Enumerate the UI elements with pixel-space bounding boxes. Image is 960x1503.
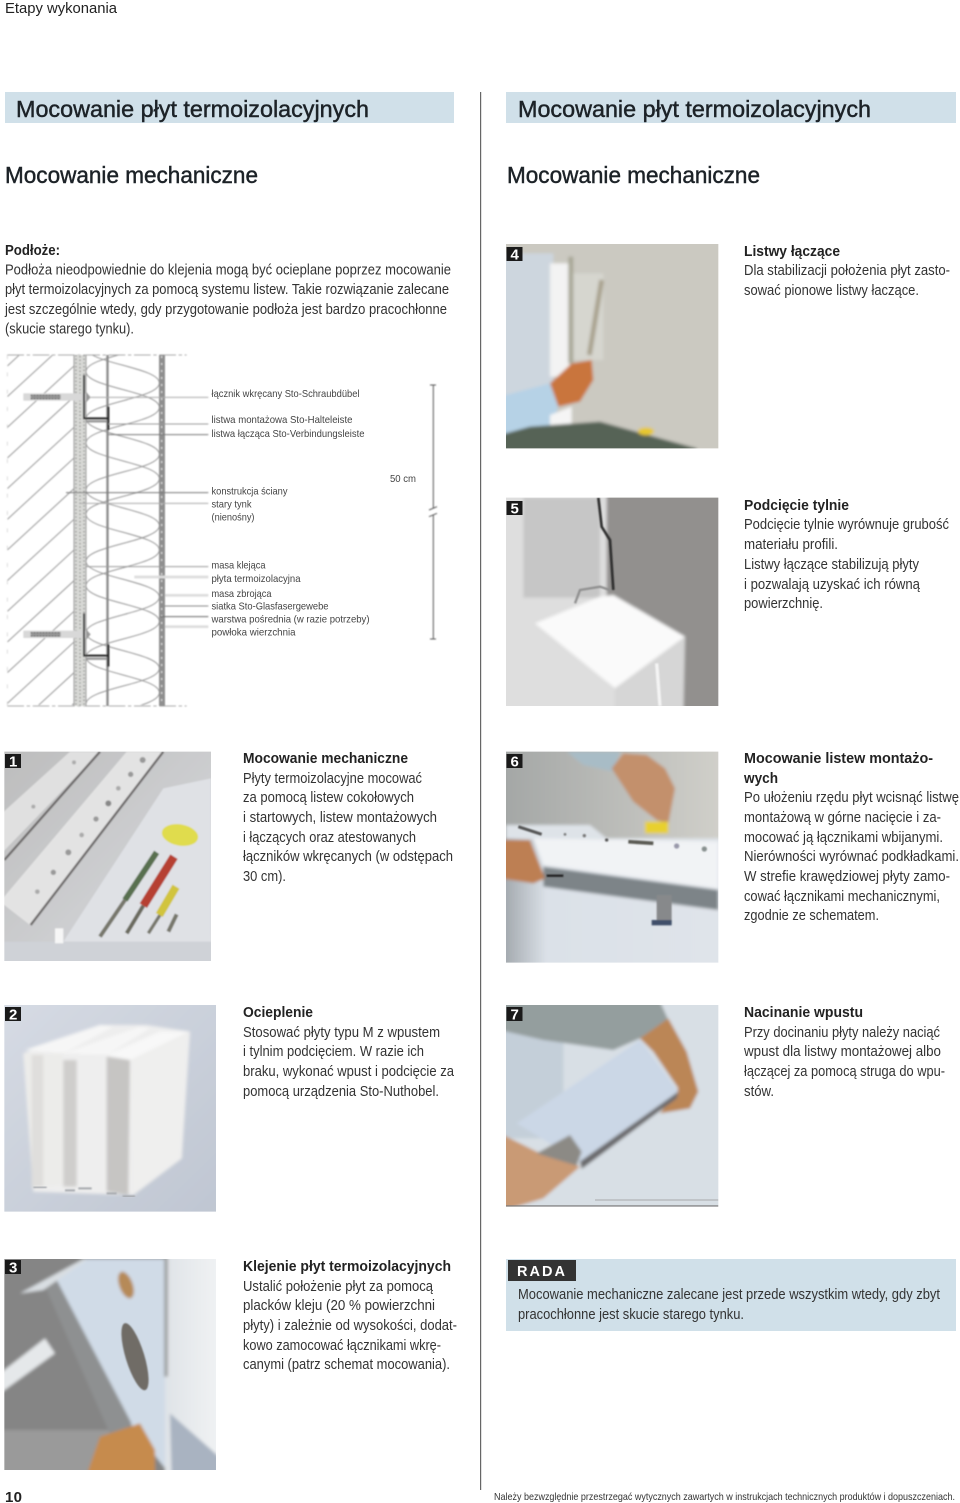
text block: substrate <box>4 243 451 338</box>
text block: step 4: sować pionowe listwy łaczące. <box>744 283 919 299</box>
callout: tip <box>506 1259 956 1331</box>
panel: right title band: Mocowanie płyt termoizolacyjnych <box>518 96 871 122</box>
text block: step 3: Klejenie płyt termoizolacyjnych <box>243 1259 451 1275</box>
badge 2: 2 <box>9 1006 17 1024</box>
text block: step 2: Ocieplenie <box>243 1005 313 1021</box>
text block: step 6: Mocowanie listew montażo- <box>744 751 933 767</box>
text block: step 2: pomocą urządzenia Sto-Nuthobel. <box>243 1084 439 1100</box>
diagram labels: warstwa pośrednia (w razie potrzeby) <box>211 614 370 626</box>
photo 7 <box>506 1005 718 1207</box>
diagram labels: 50 cm <box>390 473 416 485</box>
badge 3 <box>5 1260 21 1276</box>
badge 3: 3 <box>9 1260 17 1276</box>
text block: step 7: Przy docinaniu płyty należy naciąć <box>744 1025 940 1041</box>
text block: step 2: i tylnim podcięciem. W razie ich <box>243 1044 424 1060</box>
left subheading: Mocowanie mechaniczne <box>5 162 258 188</box>
diagram labels: stary tynk <box>212 498 252 510</box>
badge 2 <box>5 1006 21 1024</box>
badge 6 <box>506 754 522 770</box>
text block: step 1 <box>243 751 453 885</box>
text block: step 5: Listwy łączące stabilizują płyty <box>744 557 920 573</box>
text block: step 6: mocować ją łącznikami wbijanymi. <box>744 830 943 846</box>
text block: step 2 <box>243 1005 455 1100</box>
text block: substrate: jest szczególnie wtedy, gdy przygotowanie podłoża jest bardzo pracochłonne <box>4 302 447 318</box>
text block: step 7 <box>743 1005 945 1100</box>
diagram labels: (nienośny) <box>212 512 254 524</box>
photo 1 <box>4 752 211 961</box>
badge 6: 6 <box>510 754 519 770</box>
panel: left title band <box>5 92 454 123</box>
text block: step 1: i startowych, listew montażowych <box>243 810 437 826</box>
text block: step 5: materiału profili. <box>744 537 838 553</box>
text block: step 7: wpust dla listwy montażowej albo <box>743 1044 941 1060</box>
text block: step 3: Ustalić położenie płyt za pomocą <box>243 1279 434 1295</box>
badge 5 <box>506 500 522 518</box>
text block: step 3: canymi (patrz schemat mocowania). <box>243 1357 450 1373</box>
text block: step 2: braku, wykonać wpust i podcięcie za <box>243 1064 455 1080</box>
photo 6 <box>506 752 718 963</box>
text block: step 6: cować łącznikami mechanicznymi, <box>744 889 940 905</box>
photo 4 <box>506 244 718 448</box>
diagram labels: łącznik wkręcany Sto-Schraubdübel <box>212 388 360 400</box>
page header: Etapy wykonania <box>5 0 118 17</box>
tip tag: RADA <box>517 1264 566 1280</box>
diagram labels <box>211 388 416 638</box>
text block: step 7: stów. <box>744 1084 774 1100</box>
panel: right title band <box>506 92 956 123</box>
text block: step 6: wych <box>743 771 778 787</box>
text block: substrate: (skucie starego tynku). <box>5 322 134 338</box>
text block: step 4 <box>744 244 950 299</box>
text block: substrate: Podłoże: <box>5 243 60 259</box>
text block: step 6: montażową w górne nacięcie i za- <box>744 810 941 826</box>
text block: substrate: Podłoża nieodpowiednie do klejenia mogą być ocieplane poprzez mocowanie <box>5 262 451 278</box>
tip tag <box>508 1260 576 1281</box>
callout: tip: pracochłonne jest skucie starego tynku. <box>518 1307 744 1323</box>
column divider <box>480 92 481 1490</box>
photo 5 <box>506 498 718 706</box>
diagram labels: konstrukcja ściany <box>212 486 288 498</box>
photo 3 <box>4 1259 216 1470</box>
photo 2 <box>0 1002 220 1215</box>
diagram labels: listwa montażowa Sto-Halteleiste <box>212 414 353 426</box>
text block: step 5 <box>744 498 949 612</box>
panel: left title band: Mocowanie płyt termoizolacyjnych <box>16 96 369 122</box>
badge 4 <box>506 246 522 264</box>
text block: step 6 <box>743 751 959 924</box>
text block: step 3 <box>243 1259 457 1373</box>
text block: step 1: Płyty termoizolacyjne mocować <box>243 771 422 787</box>
text block: step 3: płyty) i zależnie od wysokości, dodat- <box>243 1318 457 1334</box>
text block: substrate: płyt termoizolacyjnych za pomocą systemu listew. Takie rozwiązanie zalecane <box>5 282 449 298</box>
text block: step 6: zgodnie ze schematem. <box>744 908 879 924</box>
diagram labels: listwa łącząca Sto-Verbindungsleiste <box>212 428 365 440</box>
diagram labels: masa klejąca <box>212 560 266 572</box>
badge 7 <box>506 1006 522 1024</box>
text block: step 1: łączników wkręcanych (w odstępach <box>243 849 453 865</box>
text block: step 3: placków kleju (20 % powierzchni <box>243 1298 435 1314</box>
text block: step 1: za pomocą listew cokołowych <box>243 790 414 806</box>
text block: step 1: Mocowanie mechaniczne <box>243 751 408 767</box>
text block: step 5: Podcięcie tylnie <box>744 498 849 514</box>
right subheading: Mocowanie mechaniczne <box>507 162 760 188</box>
text block: step 2: Stosować płyty typu M z wpustem <box>243 1025 440 1041</box>
text block: step 3: kowo zamocować łącznikami wkrę- <box>243 1338 441 1354</box>
text block: step 1: i łączących oraz atestowanych <box>243 830 416 846</box>
text block: step 5: i pozwalają uzyskać ich równą <box>744 577 921 593</box>
badge 5: 5 <box>510 500 519 518</box>
wall section drawing <box>6 354 438 708</box>
badge 7: 7 <box>510 1006 519 1024</box>
badge 4: 4 <box>510 246 520 264</box>
diagram labels: powłoka wierzchnia <box>212 626 296 638</box>
text block: step 1: 30 cm). <box>243 869 286 885</box>
diagram labels: masa zbrojąca <box>212 588 272 600</box>
diagram labels: siatka Sto-Glasfasergewebe <box>212 600 329 612</box>
diagram labels: płyta termoizolacyjna <box>212 573 301 585</box>
text block: step 5: powierzchnię. <box>744 596 823 612</box>
badge 1: 1 <box>9 754 17 770</box>
text block: step 4: Listwy łączące <box>744 244 840 260</box>
text block: step 7: Nacinanie wpustu <box>744 1005 863 1021</box>
badge 1 <box>5 754 21 770</box>
